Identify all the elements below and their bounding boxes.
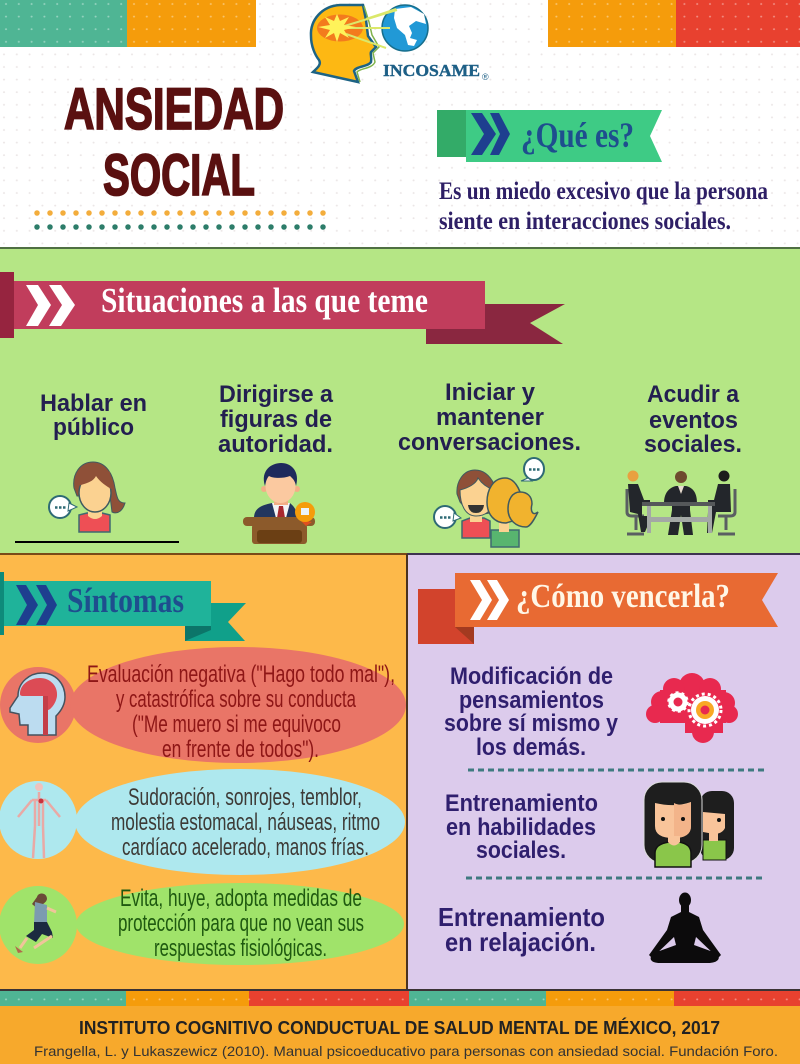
panel: situaciones <box>0 247 800 554</box>
symptom: behaviour <box>0 883 404 965</box>
symptom: behaviour: respuestas fisiológicas. <box>154 935 327 962</box>
top colour bars <box>0 0 800 47</box>
logo name: INCOSAME <box>383 61 480 80</box>
people <box>628 470 638 482</box>
icon: rays <box>338 9 397 48</box>
title: SOCIAL <box>103 143 255 208</box>
symptom: physiological: cardíaco acelerado, manos frías. <box>122 834 369 861</box>
ribbon: síntomas: Síntomas <box>67 581 184 620</box>
text: acudir a eventos: eventos <box>649 407 738 434</box>
ribbon: situaciones: Situaciones a las que teme <box>101 281 428 320</box>
text: dirigirse a figuras: Dirigirse a <box>219 381 334 408</box>
footer citation: Frangella, L. y Lukaszewicz (2010). Manual psicoeducativo para personas con ansiedad social. Fundación Foro. <box>34 1043 778 1059</box>
text: iniciar conversaciones <box>398 379 581 456</box>
icon: head <box>311 5 376 82</box>
icon: brain glow <box>317 14 363 42</box>
text: modificación de pensamientos <box>444 663 619 761</box>
icon: face contour <box>357 6 379 82</box>
symptom: physiological <box>0 769 405 875</box>
text: entrenamiento habilidades <box>445 790 598 864</box>
symptom: behaviour: Evita, huye, adopta medidas de <box>120 885 362 912</box>
text: dirigirse a figuras: autoridad. <box>218 431 333 458</box>
icon: meeting table <box>627 470 735 535</box>
header background <box>0 0 800 248</box>
symptom: cognitive: y catastrófica sobre su conducta <box>116 686 356 713</box>
dotted divider <box>37 213 327 227</box>
text: iniciar conversaciones: Iniciar y <box>445 379 536 406</box>
text: iniciar conversaciones: conversaciones. <box>398 429 581 456</box>
icon: body <box>18 783 60 858</box>
logo: INCOSAME: ® <box>482 72 489 82</box>
symptom: cognitive: Evaluación negativa ("Hago todo mal"), <box>87 661 395 688</box>
symptom: physiological: molestia estomacal, náuseas, ritmo <box>111 809 380 836</box>
text: hablar en público: Hablar en <box>40 390 147 417</box>
text: modificación de pensamientos: los demás. <box>476 734 586 761</box>
icon: continents <box>394 7 426 46</box>
text: entrenamiento relajación: en relajación. <box>445 927 596 957</box>
text: entrenamiento relajación: Entrenamiento <box>438 902 605 932</box>
definition text: siente en interacciones sociales. <box>439 208 731 235</box>
text: modificación de pensamientos: pensamientos <box>459 687 604 714</box>
text: dirigirse a figuras <box>218 381 334 458</box>
panel: cómo vencerla <box>406 553 800 990</box>
text: entrenamiento habilidades: sociales. <box>476 837 566 864</box>
text: dirigirse a figuras: figuras de <box>220 406 332 433</box>
bottom colour stripes <box>0 989 800 1006</box>
title <box>64 77 284 208</box>
ribbon: cómo vencerla: ¿Cómo vencerla? <box>516 578 730 615</box>
symptom: cognitive <box>0 647 406 763</box>
text: hablar en público <box>40 390 147 441</box>
icon: cloud brain with gears <box>646 673 738 743</box>
panel: síntomas <box>0 553 407 990</box>
icon: meditation silhouette <box>649 892 721 963</box>
title: ANSIEDAD <box>64 77 284 142</box>
logo: INCOSAME <box>311 5 489 82</box>
text: modificación de pensamientos: sobre sí mismo y <box>444 710 619 737</box>
text: entrenamiento habilidades: Entrenamiento <box>445 790 598 817</box>
icon: runner <box>15 893 56 953</box>
icon: globe <box>382 5 428 51</box>
text: entrenamiento habilidades: en habilidades <box>446 814 596 841</box>
table <box>642 502 715 506</box>
symptom: cognitive: ("Me muero si me equivoco <box>132 711 341 738</box>
footer <box>0 1006 800 1064</box>
footer title: INSTITUTO COGNITIVO CONDUCTUAL DE SALUD MENTAL DE MÉXICO, 2017 <box>79 1017 720 1038</box>
ribbon: cómo vencerla <box>418 573 778 644</box>
text: acudir a eventos: sociales. <box>644 431 742 458</box>
text: entrenamiento relajación <box>438 902 605 957</box>
text: acudir a eventos <box>644 381 742 458</box>
text: hablar en público: público <box>53 414 134 441</box>
symptom: behaviour: protección para que no vean sus <box>118 910 364 937</box>
icon: two women talking <box>434 458 544 547</box>
ribbon: Qué es: ¿Qué es? <box>521 115 634 155</box>
icon: woman speaking <box>49 462 125 532</box>
ribbon: Qué es <box>437 110 662 162</box>
definition text <box>439 178 768 235</box>
text: iniciar conversaciones: mantener <box>436 404 544 431</box>
symptom: physiological: Sudoración, sonrojes, temblor, <box>128 784 362 811</box>
ribbon: síntomas <box>0 572 246 641</box>
ribbon: situaciones <box>0 272 565 344</box>
icon: head with brain <box>10 673 65 735</box>
text: modificación de pensamientos: Modificación de <box>450 663 613 690</box>
icon: two girls <box>644 782 734 867</box>
text: acudir a eventos: Acudir a <box>647 381 740 408</box>
icon: speaker at podium <box>243 463 315 544</box>
chairs <box>627 489 735 534</box>
underline <box>15 541 179 543</box>
symptom: cognitive: en frente de todos"). <box>162 736 319 763</box>
